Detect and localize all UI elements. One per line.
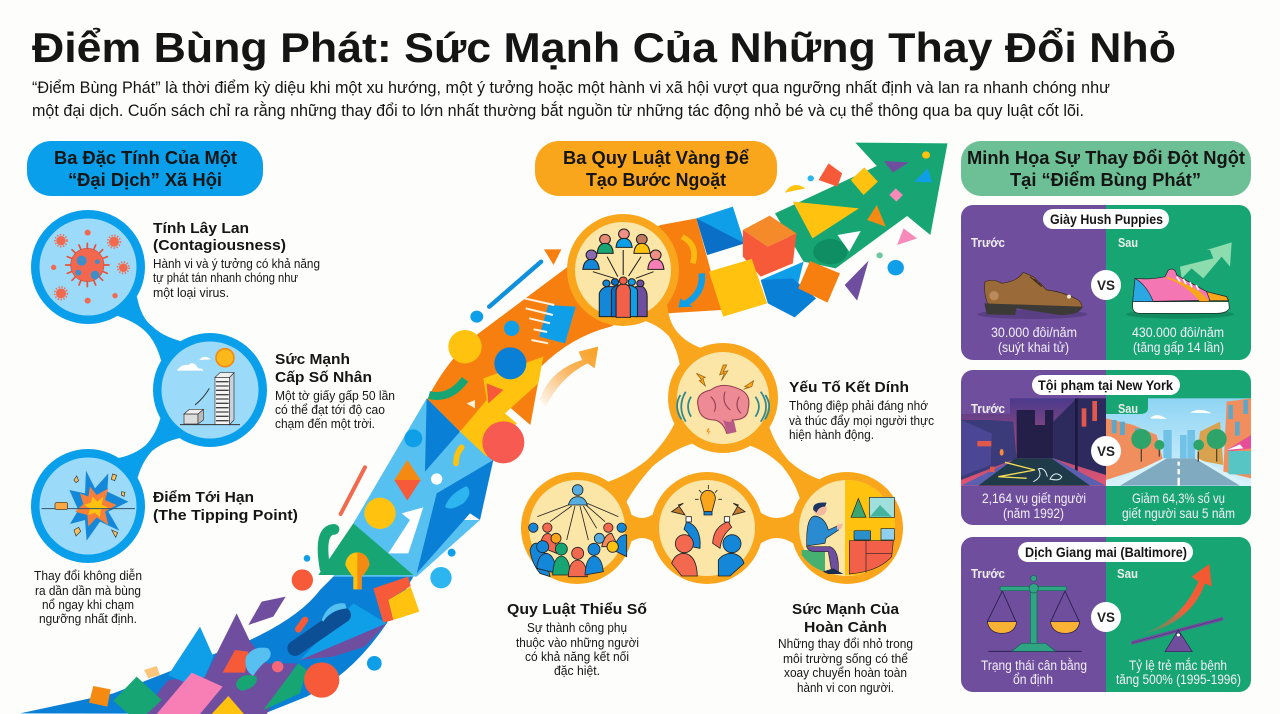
label: after: Sau: [1117, 566, 1138, 581]
heading pill: three rules: Tạo Bước Ngoặt: [586, 170, 726, 190]
scene: dark street before: [961, 398, 1106, 487]
icon: bright sneaker with growth arrow: [1126, 242, 1234, 319]
panel: orange rule chain: [521, 214, 903, 584]
text: before figures: [982, 491, 1086, 521]
label: before: Trước: [971, 235, 1005, 250]
text: before figures: Trạng thái cân bằng: [981, 658, 1087, 673]
heading pill: three traits: Ba Đặc Tính Của Một: [54, 148, 237, 168]
panel: Hush Puppies comparison: [961, 205, 1251, 360]
text: exponential power: chạm đến một trời.: [275, 416, 375, 431]
text: before figures: [991, 325, 1077, 355]
text: power of context: hành vi con người.: [797, 680, 894, 695]
text: contagiousness: [153, 220, 320, 300]
text: after figures: 430.000 đôi/năm: [1132, 325, 1224, 340]
icon: vs badge: [1091, 602, 1121, 632]
text: exponential power: Cấp Số Nhân: [275, 369, 372, 386]
text: after figures: (tăng gấp 14 lần): [1133, 340, 1224, 355]
icon: vs badge: [1091, 436, 1121, 466]
text: tipping point description: [34, 568, 142, 626]
text: before figures: ổn định: [1013, 672, 1053, 687]
heading pill: three traits: “Đại Dịch” Xã Hội: [68, 170, 222, 190]
text: contagiousness: tự phát tán nhanh chóng như: [153, 270, 298, 285]
text: after figures: Giảm 64,3% số vụ: [1132, 491, 1225, 506]
text: stickiness factor: Thông điệp phải đáng nhớ: [789, 398, 928, 413]
label: before: [961, 398, 1010, 416]
text: after figures: tăng 500% (1995-1996): [1116, 672, 1241, 687]
icon: crowd and connected people: [567, 214, 679, 326]
rising arrow ribbon: upper section with green arrowhead: [427, 143, 947, 432]
text: power of context: xoay chuyển hoàn toàn: [784, 665, 907, 680]
icon: vs badge: VS: [1097, 443, 1115, 459]
label: after: Sau: [1118, 401, 1138, 416]
panel: blue trait chain: [31, 210, 267, 563]
text: tipping point: [153, 489, 298, 524]
pill: case title: Giày Hush Puppies: [1050, 211, 1163, 227]
text: law of the few: thuộc vào những người: [516, 635, 639, 650]
title: Điểm Bùng Phát: Sức Mạnh Của Những Thay Đổi Nhỏ: [32, 24, 1176, 71]
label: before: Trước: [971, 566, 1005, 581]
text: law of the few: Quy Luật Thiểu Số: [507, 601, 647, 618]
icon: magnetic attraction: [651, 472, 763, 584]
text: power of context: Những thay đổi nhỏ trong: [778, 636, 913, 651]
text: after figures: giết người sau 5 năm: [1122, 506, 1235, 521]
scene: clean street after: [1106, 398, 1251, 487]
rising arrow ribbon: middle section: [355, 321, 543, 520]
text: after figures: [1132, 325, 1224, 355]
heading pill: three traits: [27, 141, 263, 196]
heading pill: illustrations: [961, 141, 1251, 196]
text: exponential power: Sức Mạnh: [275, 351, 350, 368]
text: exponential power: Một tờ giấy gấp 50 lần: [275, 388, 395, 403]
text: contagiousness: Tính Lây Lan: [153, 220, 249, 237]
heading pill: illustrations: Tại “Điểm Bùng Phát”: [1010, 170, 1201, 190]
panel: Baltimore syphilis comparison: [961, 537, 1251, 692]
text: power of context: Hoàn Cảnh: [804, 619, 887, 636]
rising arrow ribbon: lower section: [20, 429, 493, 714]
text: stickiness factor: Yếu Tố Kết Dính: [789, 379, 909, 396]
text: exponential power: [275, 351, 395, 431]
icon: tilted seesaw with rising arrow: [1133, 564, 1222, 652]
text: after figures: [1116, 658, 1241, 687]
label: after: Sau: [1118, 235, 1138, 250]
text: contagiousness: (Contagiousness): [153, 237, 286, 254]
icon: brain: [668, 343, 778, 453]
text: contagiousness: một loại virus.: [153, 285, 229, 300]
text: before figures: 2,164 vụ giết người: [982, 491, 1086, 506]
text: tipping point: (The Tipping Point): [153, 507, 298, 524]
text: tipping point: Điểm Tới Hạn: [153, 489, 254, 506]
text: tipping point description: ngưỡng nhất định.: [39, 611, 137, 626]
text: contagiousness: Hành vi và ý tưởng có khả năng: [153, 256, 320, 271]
label: after: [1106, 398, 1148, 416]
icon: vs badge: VS: [1097, 277, 1115, 293]
text: stickiness factor: [789, 379, 934, 442]
heading pill: three rules: Ba Quy Luật Vàng Để: [563, 148, 749, 168]
text: before figures: [981, 658, 1087, 687]
text: tipping point description: nổ ngay khi chạm: [42, 597, 134, 612]
text: before figures: (suýt khai tử): [998, 340, 1069, 355]
text: power of context: Sức Mạnh Của: [792, 601, 900, 618]
text: before figures: (năm 1992): [1003, 506, 1064, 521]
label: before: Trước: [971, 401, 1005, 416]
text: exponential power: có thể đạt tới độ cao: [275, 402, 385, 417]
text: after figures: Tỷ lệ trẻ mắc bệnh: [1129, 658, 1227, 673]
heading pill: three rules: [535, 141, 777, 196]
panel: New York crime comparison: [961, 370, 1251, 525]
text: law of the few: [507, 601, 647, 678]
text: law of the few: đặc hiệt.: [554, 663, 600, 678]
icon: explosion: [31, 449, 145, 563]
heading pill: illustrations: Minh Họa Sự Thay Đổi Đột Ngột: [967, 148, 1245, 168]
icon: tall paper tower: [153, 333, 267, 447]
text: power of context: môi trường sống có thể: [783, 651, 908, 666]
text: law of the few: có khả năng kết nối: [525, 649, 629, 664]
text: before figures: 30.000 đôi/năm: [991, 325, 1077, 340]
icon: virus: [31, 210, 145, 324]
icon: connector network: [521, 472, 633, 584]
pill: case title: Tội phạm tại New York: [1038, 377, 1173, 393]
text: stickiness factor: hiện hành động.: [789, 427, 874, 442]
intro paragraph: [32, 78, 1110, 120]
text: after figures: [1122, 491, 1235, 521]
text: tipping point description: Thay đổi không diễn: [34, 568, 142, 583]
text: law of the few: Sự thành công phụ: [527, 620, 627, 635]
text: power of context: [778, 601, 913, 695]
icon: vs badge: VS: [1097, 609, 1115, 625]
icon: vs badge: [1091, 270, 1121, 300]
text: stickiness factor: và thúc đẩy mọi người thực: [789, 413, 934, 428]
icon: worn brown shoe: [977, 272, 1087, 319]
intro paragraph: một đại dịch. Cuốn sách chỉ ra rằng những thay đổi to lớn nhất thường bắt nguồn từ những tác động nhỏ bé và cụ thể thông qua ba quy luật cốt lõi.: [32, 101, 1084, 120]
icon: person in changed environment: [791, 472, 903, 584]
icon: balance scale: [987, 575, 1082, 651]
text: tipping point description: ra dần dần mà bùng: [35, 583, 141, 598]
pill: case title: Dịch Giang mai (Baltimore): [1025, 544, 1187, 560]
intro paragraph: “Điểm Bùng Phát” là thời điểm kỳ diệu khi một xu hướng, một ý tưởng hoặc một hành vi xã hội vượt qua ngưỡng nhất định và lan ra nhanh chóng như: [32, 78, 1110, 97]
